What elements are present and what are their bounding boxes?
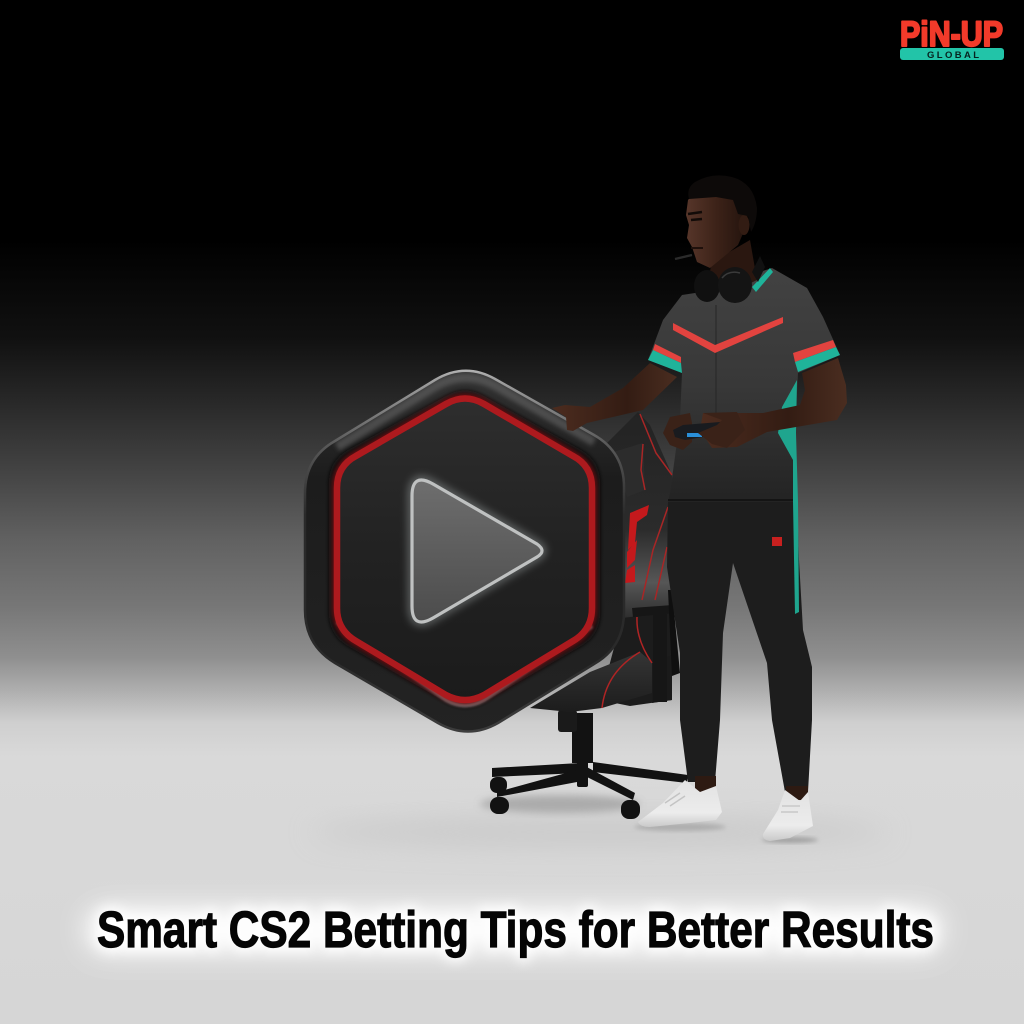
chair seat <box>530 617 672 712</box>
badge outer rim <box>305 371 624 732</box>
headset microphone <box>675 255 692 259</box>
shirt collar teal <box>752 268 773 292</box>
hair <box>688 175 757 232</box>
ankles <box>695 776 808 800</box>
shirt zip seam <box>715 305 717 420</box>
mouth <box>691 247 703 249</box>
shirt hem <box>668 499 797 501</box>
person: gamer <box>552 175 847 841</box>
headphones <box>694 256 765 303</box>
head <box>686 175 757 268</box>
brow <box>688 212 702 214</box>
icon: play triangle <box>412 480 542 622</box>
top rim sheen <box>337 378 594 447</box>
floor shadow <box>310 795 890 846</box>
arm holding controller <box>700 358 847 448</box>
badge inner recess <box>329 390 600 708</box>
chair base <box>490 710 688 819</box>
shoe right <box>763 790 813 841</box>
shirt left sleeve bands <box>648 344 682 373</box>
right hand fingers <box>698 412 745 448</box>
shirt <box>648 268 840 502</box>
hexagon play badge <box>305 371 624 732</box>
chair armrest <box>632 590 680 702</box>
chair backrest <box>600 412 672 625</box>
chair red piping <box>640 414 672 600</box>
controller <box>663 412 745 450</box>
chair pillow <box>613 443 645 497</box>
chair lower back <box>600 612 672 706</box>
gaming chair <box>490 412 688 819</box>
trousers <box>667 502 812 792</box>
shirt red chevron <box>673 317 783 353</box>
lower ring highlight <box>337 622 592 706</box>
shirt right sleeve bands <box>793 340 840 372</box>
eye <box>691 219 702 220</box>
play triangle glow <box>412 480 542 622</box>
neck <box>708 240 757 296</box>
arm and hand holding badge <box>552 363 677 431</box>
face <box>686 186 748 268</box>
logo teal bar: GLOBAL <box>927 50 979 61</box>
logo: Pin-Up Global <box>900 15 1004 61</box>
ear <box>738 215 750 235</box>
left hand <box>663 413 692 450</box>
gamepad <box>673 422 722 440</box>
badge red neon ring <box>337 398 592 700</box>
logo wordmark: PiN-UP <box>900 15 1003 54</box>
title <box>86 901 942 958</box>
chair red panels <box>625 505 649 583</box>
shoe left <box>638 780 722 827</box>
shirt teal side panel <box>778 352 798 502</box>
